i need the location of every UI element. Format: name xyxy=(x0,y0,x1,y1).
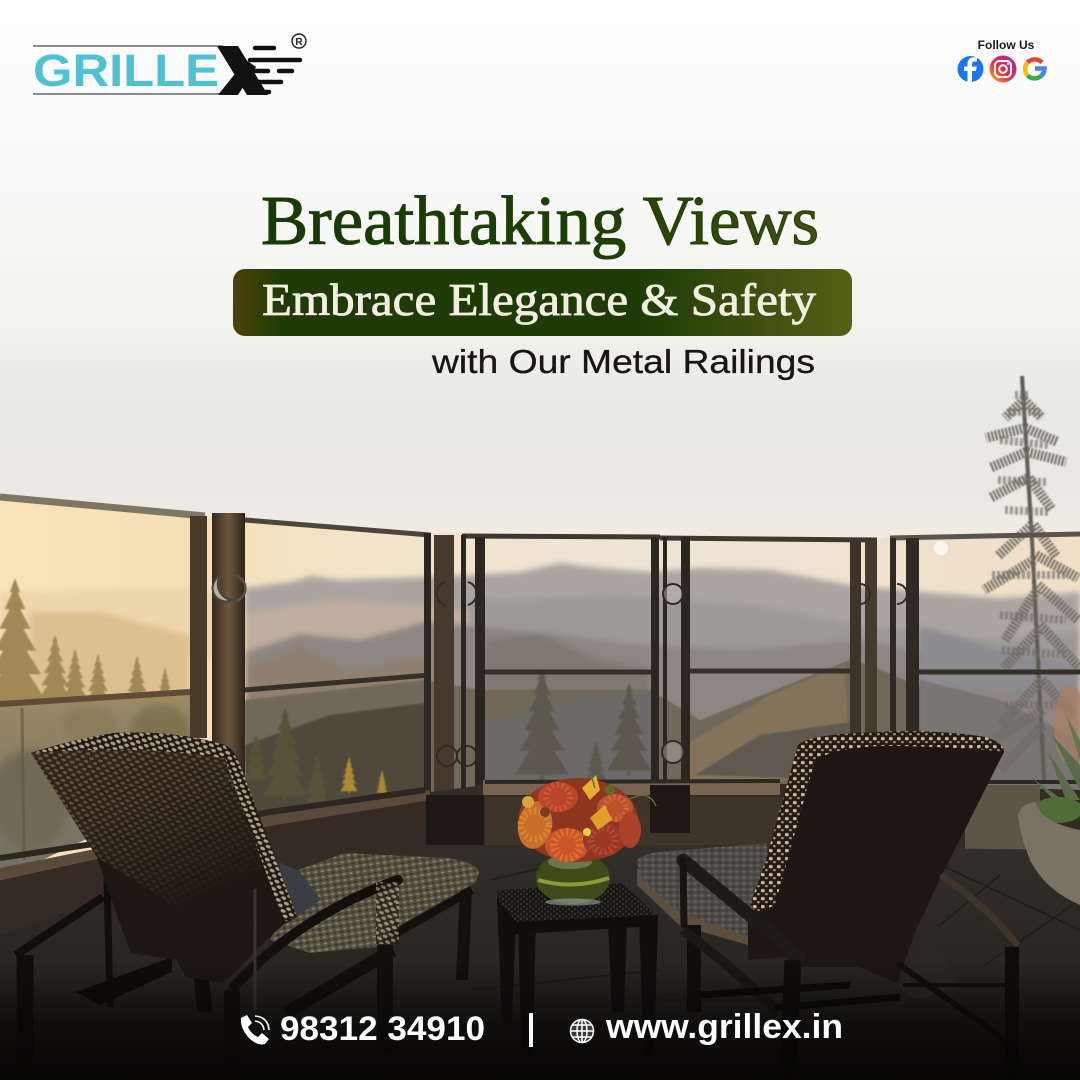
railing: top rails xyxy=(0,497,1080,540)
sunset sky xyxy=(0,490,1080,910)
logo X mark xyxy=(217,46,300,95)
follow us label: Follow Us xyxy=(978,38,1035,52)
logo xyxy=(33,34,306,96)
banner: embrace elegance and safety xyxy=(233,269,852,336)
tall pine tree at right xyxy=(984,376,1080,780)
arm post xyxy=(376,882,399,944)
banner text: Embrace Elegance & Safety xyxy=(262,274,816,325)
woven back rest surface xyxy=(31,732,285,930)
registered mark: R xyxy=(295,37,303,48)
icon: globe xyxy=(570,1020,594,1042)
contact bar xyxy=(241,1008,843,1048)
icon: google xyxy=(1025,59,1044,78)
woven side edge xyxy=(750,745,815,912)
railing: ring ornaments xyxy=(213,576,907,766)
seat frame xyxy=(683,925,900,1012)
distant mountain range xyxy=(0,563,1080,760)
front arm rest xyxy=(232,880,398,1080)
woven shading xyxy=(31,732,285,930)
seat side xyxy=(637,868,748,945)
parapet wall xyxy=(0,780,1080,960)
icon: facebook xyxy=(958,56,984,82)
logo rules xyxy=(33,45,223,95)
sub-headline: with Our Metal Railings xyxy=(431,343,815,380)
pine trees centre xyxy=(515,668,651,782)
floor xyxy=(0,845,1080,1080)
registered mark xyxy=(292,34,306,48)
far arm rest xyxy=(900,877,1016,1080)
left lounge chair xyxy=(16,732,479,1080)
follow us block xyxy=(958,38,1044,82)
flower arrangement xyxy=(514,772,656,906)
table top xyxy=(497,883,658,932)
floor tile lines xyxy=(470,850,1080,1000)
sun reflection on glass xyxy=(934,541,948,555)
leg panel xyxy=(897,937,962,1000)
seat cushion xyxy=(637,843,770,940)
separator xyxy=(529,1013,533,1047)
back rest xyxy=(31,732,297,983)
seat frame xyxy=(286,890,472,1053)
logo wordmark: GRILLE xyxy=(33,45,219,96)
table legs xyxy=(497,895,658,1070)
warm orange shrub behind planter xyxy=(1054,685,1080,765)
pine trees centre-left xyxy=(244,708,329,807)
woven top highlight xyxy=(31,732,232,760)
golden larch trees xyxy=(340,757,388,794)
woven top edge xyxy=(798,731,1004,760)
near hills xyxy=(245,660,1080,828)
photo: view through glass railing xyxy=(0,490,1080,910)
phone number: 98312 34910 xyxy=(280,1010,485,1048)
planter with succulent xyxy=(1018,715,1080,905)
seat cushion xyxy=(270,853,479,953)
icon: instagram xyxy=(990,56,1016,82)
banner background xyxy=(233,269,852,336)
near arm rest xyxy=(683,860,800,1080)
back rest xyxy=(748,731,1004,983)
ground cover xyxy=(1033,797,1080,823)
lower-left glass: dim hazy forest xyxy=(0,692,190,880)
headline: Breathtaking Views xyxy=(261,183,819,260)
right lounge chair xyxy=(637,731,1016,1080)
stone bowl xyxy=(1018,802,1080,905)
railing: posts xyxy=(190,513,919,847)
plant leaves xyxy=(1032,715,1080,812)
blooms xyxy=(514,772,656,862)
rear frame xyxy=(16,877,205,1080)
side table xyxy=(497,883,658,1070)
pine trees left xyxy=(0,578,174,708)
railing: mid rails xyxy=(0,671,1080,704)
icon: phone xyxy=(241,1015,269,1044)
pillow xyxy=(279,862,321,917)
glass vase xyxy=(536,852,610,906)
bottom shade xyxy=(0,960,1080,1080)
website: www.grillex.in xyxy=(605,1008,843,1046)
woven edge xyxy=(222,746,297,922)
